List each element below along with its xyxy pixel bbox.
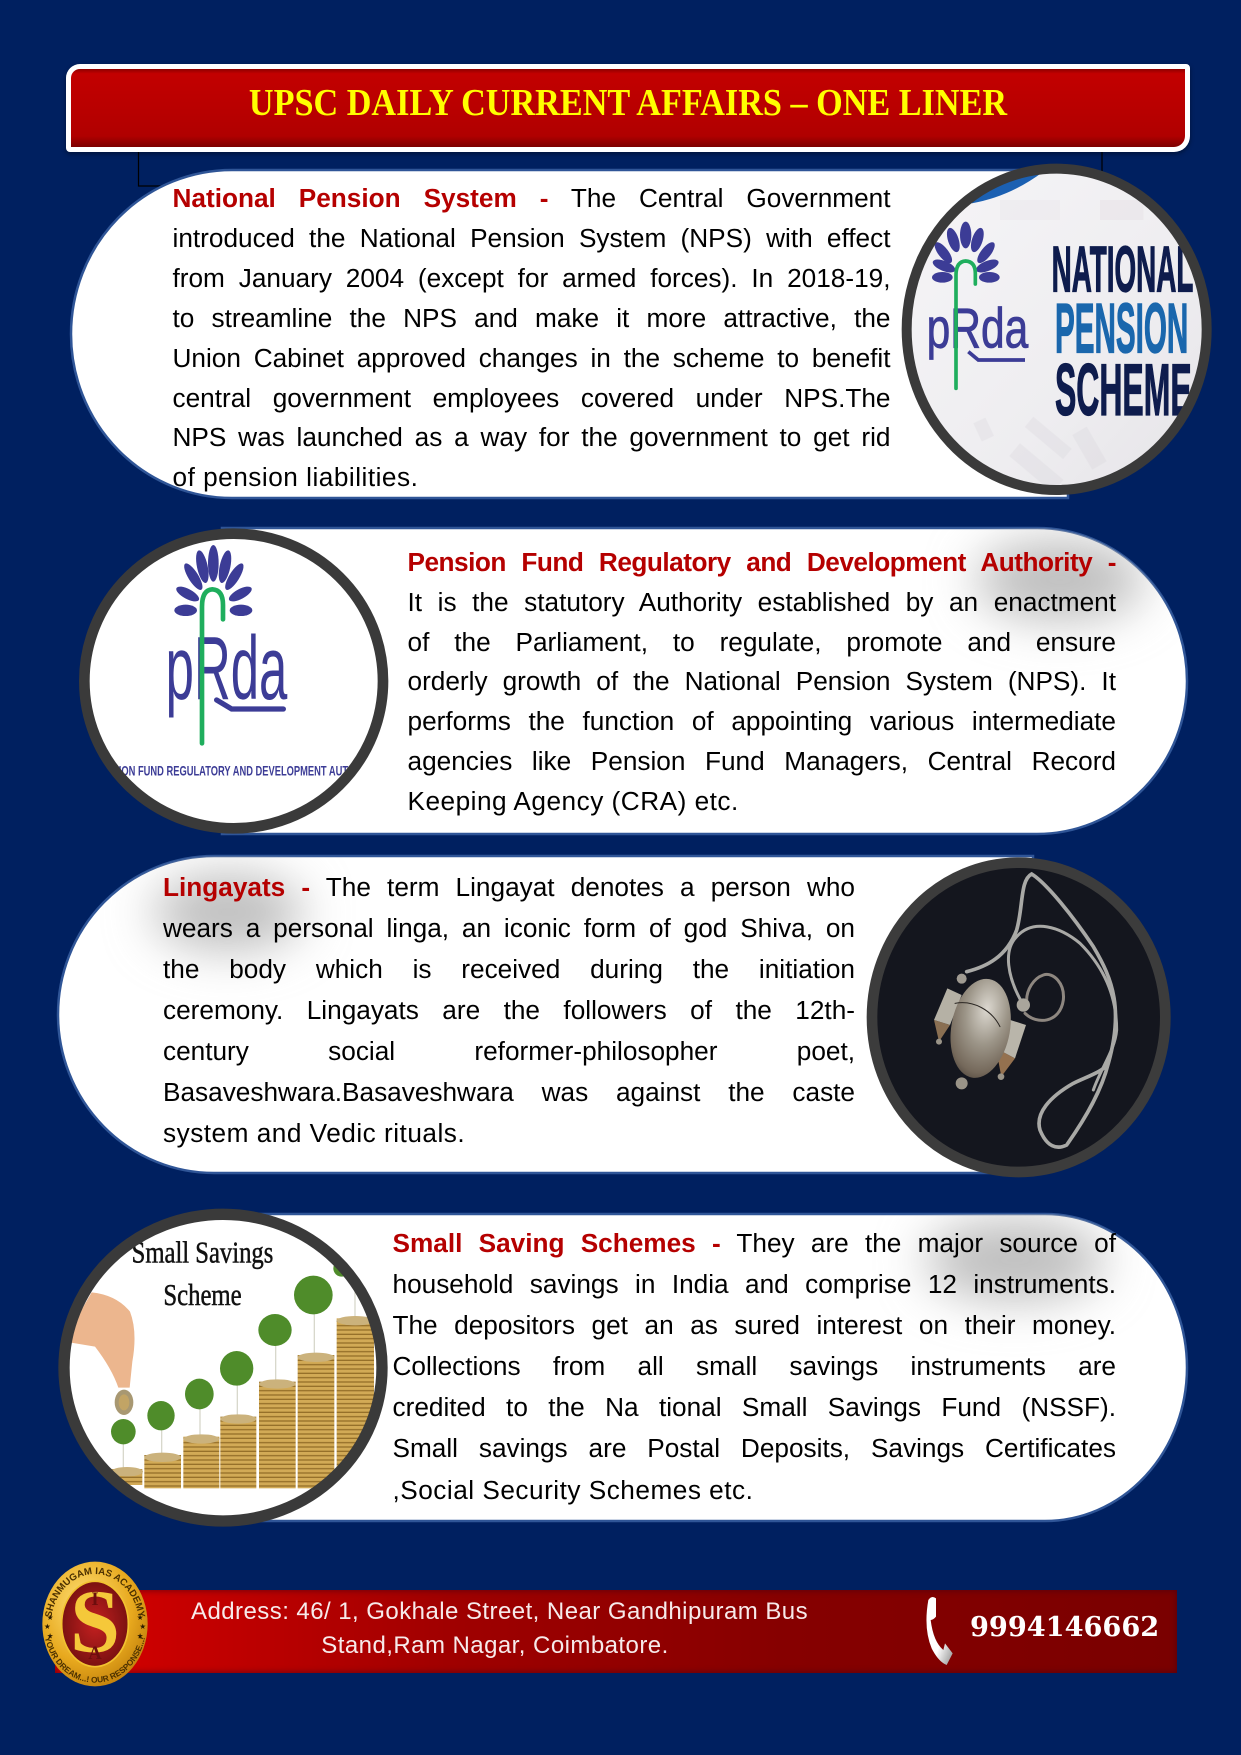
text block: PFRDA: orderly growth of the National Pension System (NPS). It bbox=[408, 666, 1116, 696]
address text bbox=[191, 1598, 808, 1659]
title text: UPSC DAILY CURRENT AFFAIRS – ONE LINER bbox=[249, 82, 1007, 124]
image: national pension scheme logo: pRda bbox=[927, 297, 1029, 360]
text block: national pension system: introduced the National Pension System (NPS) with effect bbox=[172, 223, 890, 253]
text block: PFRDA: of the Parliament, to regulate, promote and ensure bbox=[408, 627, 1116, 657]
text block: lingayats: the body which is received during the initiation bbox=[163, 954, 855, 984]
text block: small saving schemes: household savings in India and comprise 12 instruments. bbox=[392, 1269, 1116, 1299]
connector lines bbox=[138, 152, 1103, 187]
logo: Shanmugam IAS Academy: ★ bbox=[137, 1613, 143, 1622]
text block: national pension system: National Pension System - The Central Government bbox=[172, 183, 890, 213]
text block: PFRDA: performs the function of appointing various intermediate bbox=[408, 706, 1116, 736]
panel: Lingayats bbox=[56, 854, 1171, 1178]
text block: small saving schemes: credited to the Na tional Small Savings Fund (NSSF). bbox=[392, 1392, 1116, 1422]
text block: national pension system: of pension liabilities. bbox=[172, 462, 418, 492]
image: PFRDA logo: PENSION FUND REGULATORY AND DEVELOPMENT AUTHORITY bbox=[93, 763, 384, 779]
address text: Address: 46/ 1, Gokhale Street, Near Gandhipuram Bus bbox=[191, 1598, 808, 1625]
logo: Shanmugam IAS Academy: ★ bbox=[47, 1631, 53, 1640]
footer contact bar bbox=[55, 1590, 1177, 1673]
title banner bbox=[66, 64, 1190, 152]
logo: Shanmugam IAS Academy: I bbox=[91, 1589, 99, 1610]
logo: Shanmugam IAS Academy: YOUR DREAM...! OUR RESPONSE...! bbox=[45, 1637, 145, 1683]
text block: lingayats: century social reformer-philosopher poet, bbox=[163, 1036, 855, 1066]
text block: national pension system: NPS was launched as a way for the government to get rid bbox=[172, 422, 890, 452]
text block: small saving schemes: The depositors get an as sured interest on their money. bbox=[392, 1310, 1116, 1340]
text block: PFRDA: Keeping Agency (CRA) etc. bbox=[408, 786, 739, 816]
text block: small saving schemes: ,Social Security Schemes etc. bbox=[392, 1475, 753, 1505]
panel: Small Saving Schemes bbox=[58, 1208, 1188, 1527]
text block: national pension system: to streamline the NPS and make it more attractive, the bbox=[172, 303, 890, 333]
logo: Shanmugam IAS Academy: SHANMUGAM IAS ACADEMY bbox=[45, 1567, 146, 1617]
text block: PFRDA: Pension Fund Regulatory and Development Authority - bbox=[408, 547, 1116, 577]
image: PFRDA logo: pRda bbox=[166, 619, 288, 719]
logo: Shanmugam IAS Academy: ★ bbox=[47, 1613, 53, 1622]
phone number: 9994146662 bbox=[970, 1611, 1159, 1643]
text block: small saving schemes: Collections from all small savings instruments are bbox=[392, 1351, 1116, 1381]
text block: lingayats: Basaveshwara.Basaveshwara was against the caste bbox=[163, 1077, 855, 1107]
text block: lingayats: ceremony. Lingayats are the followers of the 12th- bbox=[163, 995, 855, 1025]
text block: PFRDA: agencies like Pension Fund Managers, Central Record bbox=[408, 746, 1116, 776]
logo: Shanmugam IAS Academy: ★ bbox=[139, 1622, 146, 1631]
text block: small saving schemes bbox=[392, 1228, 1116, 1505]
text block: small saving schemes: Small savings are Postal Deposits, Savings Certificates bbox=[392, 1433, 1116, 1463]
text block: lingayats: system and Vedic rituals. bbox=[163, 1118, 465, 1148]
icon: telephone handset bbox=[926, 1597, 953, 1665]
logo: Shanmugam IAS Academy: ★ bbox=[44, 1622, 51, 1631]
text block: national pension system bbox=[172, 164, 1191, 495]
image: linga pendant necklace bbox=[871, 862, 1166, 1173]
text block: national pension system: central government employees covered under NPS.The bbox=[172, 383, 890, 413]
text block: small saving schemes: Small Saving Schemes - They are the major source of bbox=[392, 1228, 1116, 1258]
logo: Shanmugam IAS Academy: S bbox=[70, 1573, 120, 1672]
text block: lingayats: Lingayats - The term Lingayat denotes a person who bbox=[163, 872, 855, 902]
logo: Shanmugam IAS Academy: A bbox=[88, 1643, 102, 1664]
logo: Shanmugam IAS Academy: ★ bbox=[137, 1631, 143, 1640]
image: small savings scheme coins and trees: Scheme bbox=[163, 1278, 242, 1312]
text block: PFRDA: It is the statutory Authority established by an enactment bbox=[408, 587, 1116, 617]
image: small savings scheme coins and trees: Small Savings bbox=[132, 1235, 273, 1269]
image: national pension scheme logo bbox=[900, 160, 1220, 507]
text block: lingayats bbox=[163, 872, 855, 1148]
image: PFRDA logo bbox=[84, 533, 384, 829]
text block: PFRDA bbox=[408, 547, 1116, 816]
address text: Stand,Ram Nagar, Coimbatore. bbox=[321, 1632, 669, 1659]
text block: national pension system: Union Cabinet approved changes in the scheme to benefit bbox=[172, 343, 890, 373]
image: small savings scheme coins and trees bbox=[63, 1214, 383, 1522]
logo: Shanmugam IAS Academy bbox=[42, 1562, 148, 1686]
text block: national pension system: from January 2004 (except for armed forces). In 2018-19, bbox=[172, 263, 890, 293]
panel: National Pension System bbox=[70, 164, 1212, 500]
panel: Pension Fund Regulatory and Development Authority bbox=[79, 526, 1188, 836]
text block: lingayats: wears a personal linga, an iconic form of god Shiva, on bbox=[163, 913, 855, 943]
